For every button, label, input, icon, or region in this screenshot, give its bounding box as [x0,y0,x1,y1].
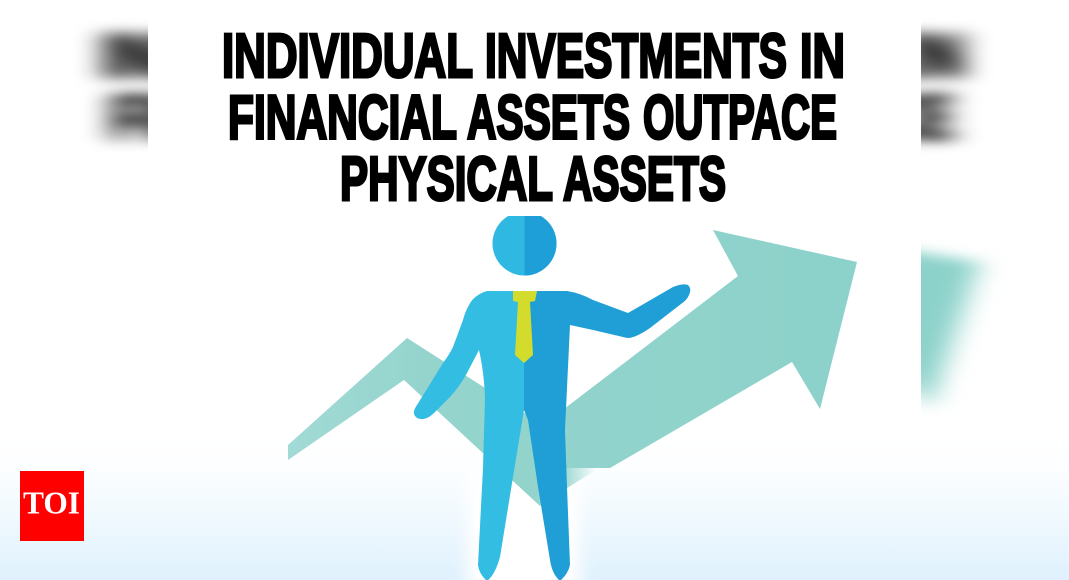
rising zigzag arrow [288,230,857,506]
title: IN [800,22,845,91]
title: OUTPACE [643,84,837,152]
businessman figure [414,212,690,580]
bottom gradient band [0,440,1069,580]
title: FINANCIAL [228,84,457,152]
title: INVESTMENTS [485,22,787,91]
title [222,22,845,214]
title: PHYSICAL [340,145,553,214]
TOI logo: TOI [23,484,80,520]
body left half [414,291,525,580]
body right half with raised arm [524,284,690,580]
blurred backdrop of title and arrow [102,21,979,440]
TOI logo [20,471,84,541]
title: ASSETS [467,84,630,152]
icon: head [492,212,556,276]
title: ASSETS [563,145,726,214]
tie [513,291,537,363]
white halo behind legs [468,474,580,580]
title: INDIVIDUAL [222,22,473,91]
